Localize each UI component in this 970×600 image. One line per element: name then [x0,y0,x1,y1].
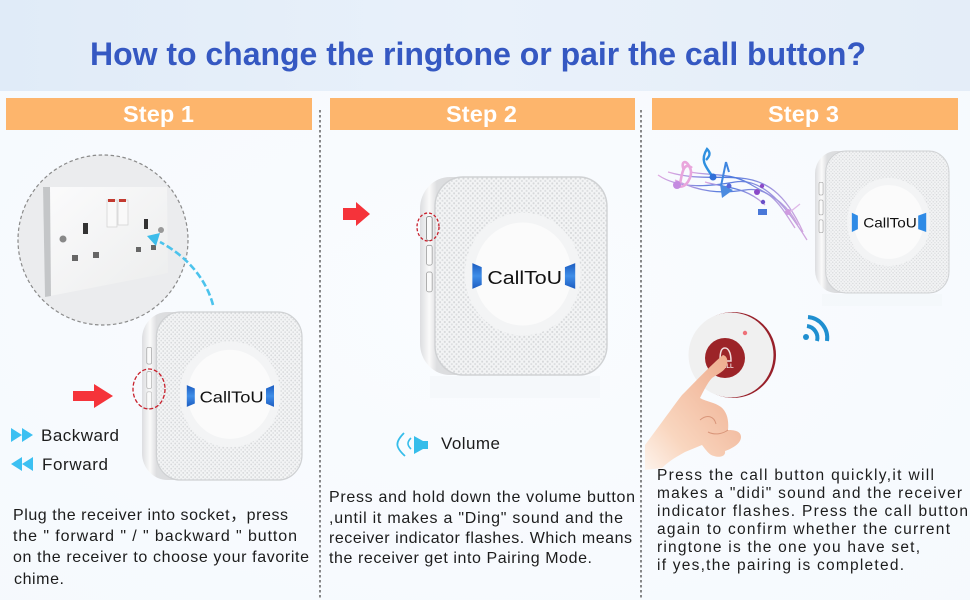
panel: step 1 [6,98,312,588]
step 2 text: the receiver get into Pairing Mode. [329,550,592,567]
step 1 heading: Step 1 [123,101,194,127]
red arrow [343,202,370,226]
icon: backward [11,428,33,442]
icon: volume [397,433,428,456]
dashed blue arrow [147,233,213,305]
step 1 text: the " forward " / " backward " button [13,528,297,545]
panel: step 2 [329,98,635,567]
step 1 text: Plug the receiver into socket，press [13,507,288,524]
backward label: Backward [41,426,119,445]
call button [688,312,776,398]
red arrow [73,384,113,408]
call button: ALL [722,364,734,370]
step 1 heading [6,98,312,130]
step 2 heading [330,98,635,130]
socket illustration [18,155,188,325]
device reflection [822,294,942,306]
hand pressing button [645,355,741,470]
receiver device step 1: CallToU [200,389,264,407]
music notes [658,149,807,240]
receiver device step 2: CallToU [487,266,562,288]
receiver device step 1 [142,312,302,480]
step 3 text: indicator flashes. Press the call button [657,503,968,520]
receiver device step 3 [815,151,949,293]
red dashed highlight circle [133,369,165,409]
step 2 text: ,until it makes a "Ding" sound and the [329,510,623,527]
volume label: Volume [441,434,500,453]
step 2 heading: Step 2 [446,101,517,127]
header banner [0,0,970,91]
step 3 text: ringtone is the one you have set, [657,539,920,556]
step 3 text [657,467,968,574]
red dashed highlight circle [417,213,439,241]
step 3 heading: Step 3 [768,101,839,127]
step 3 text: Press the call button quickly,it will [657,467,934,484]
step 3 text: again to confirm whether the current [657,521,951,538]
icon: forward [11,457,33,471]
icon: wireless signal [803,317,827,341]
step 3 heading [652,98,958,130]
forward label: Forward [42,455,108,474]
step 1 text [13,507,309,588]
step 2 text [329,489,635,567]
step 2 text: receiver indicator flashes. Which means [329,530,632,547]
step 1 text: on the receiver to choose your favorite [13,549,309,566]
title: How to change the ringtone or pair the call button? [90,36,866,72]
step 3 text: if yes,the pairing is completed. [657,557,904,574]
step 3 text: makes a "didi" sound and the receiver [657,485,962,502]
device reflection [430,376,600,398]
receiver device step 3: CallToU [863,215,917,231]
step 2 text: Press and hold down the volume button [329,489,635,506]
panel: step 3 [645,98,968,574]
receiver device step 2 [420,177,607,375]
step 1 text: chime. [14,571,64,588]
